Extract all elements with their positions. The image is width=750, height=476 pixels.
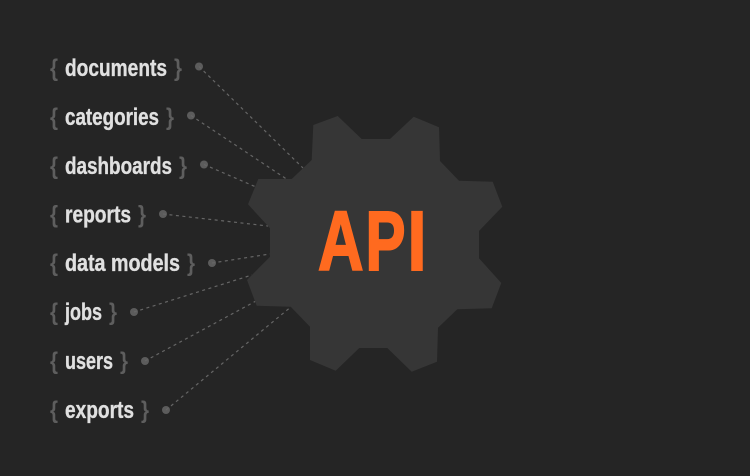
label: dashboards: } — [179, 153, 187, 180]
connector: categories — [187, 112, 288, 180]
label: categories: categories — [65, 104, 159, 131]
label: reports: } — [138, 202, 146, 228]
connector: documents — [195, 62, 303, 168]
label: documents: { — [50, 55, 58, 82]
label: categories: { — [50, 104, 58, 131]
icon: gear — [247, 116, 502, 372]
label: reports: { — [50, 202, 58, 228]
label: reports: reports — [65, 202, 131, 228]
connector: data models — [208, 254, 270, 267]
connector: jobs — [130, 275, 252, 316]
label: documents: } — [174, 55, 182, 82]
label: categories: } — [166, 104, 174, 131]
label: dashboards: dashboards — [65, 153, 172, 180]
connector: users — [141, 301, 256, 365]
connector: exports — [162, 306, 292, 414]
label: exports: { — [50, 397, 58, 424]
connector: reports — [159, 210, 268, 226]
label: exports: exports — [65, 397, 134, 424]
label: users: users — [65, 348, 113, 375]
label: jobs: } — [109, 299, 117, 326]
label: exports: } — [141, 397, 149, 424]
title: API: P — [366, 194, 406, 288]
label: data models: } — [187, 250, 195, 277]
label: data models: { — [50, 250, 58, 277]
label: jobs: { — [50, 299, 58, 326]
label: users: { — [50, 348, 58, 375]
label: data models: data models — [65, 250, 180, 277]
label: dashboards: { — [50, 153, 58, 180]
label: jobs: jobs — [64, 299, 102, 326]
label: documents: documents — [65, 55, 167, 82]
label: users: } — [120, 348, 128, 375]
title: API: A — [318, 194, 364, 288]
title: API: I — [408, 194, 426, 288]
connector: dashboards — [200, 160, 256, 187]
